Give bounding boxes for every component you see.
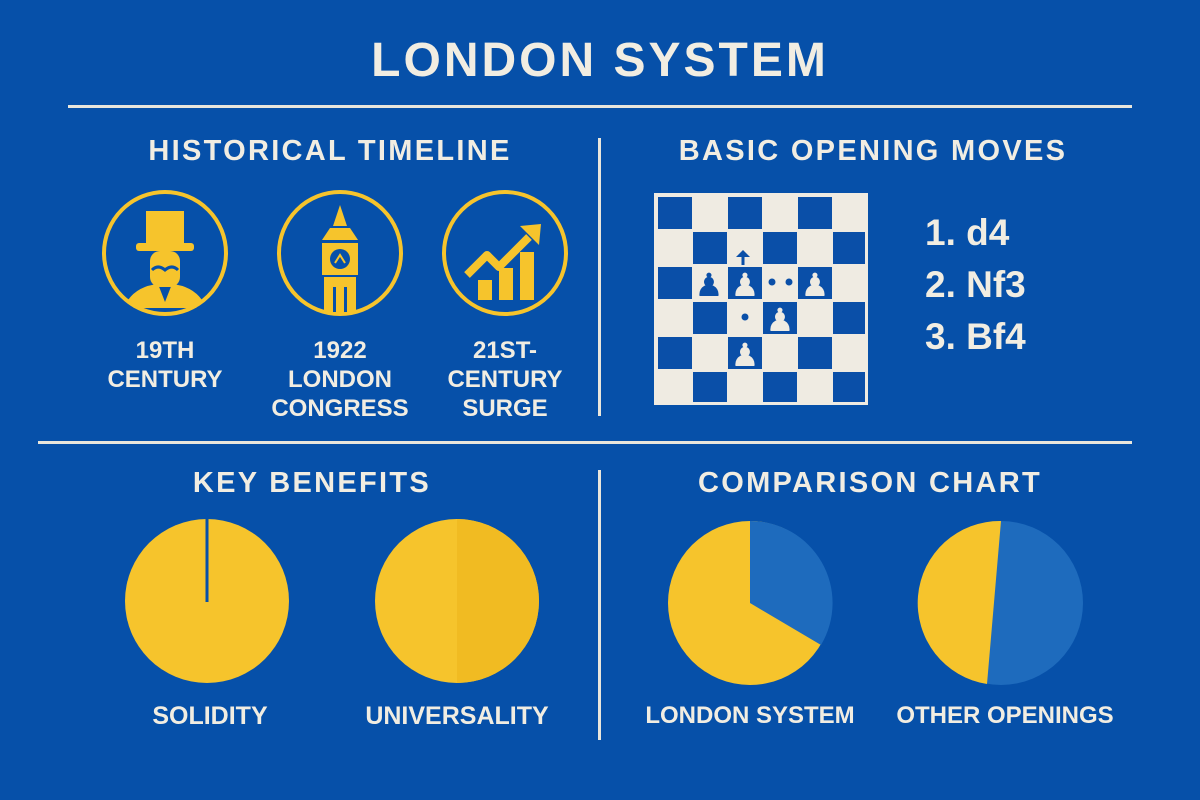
move list: 2. Nf3 [925, 264, 1026, 305]
text: CENTURY [447, 366, 563, 393]
pieces: ♟ [731, 337, 759, 373]
text: 1922 [313, 337, 367, 364]
move list [925, 212, 1026, 357]
pieces: ♟ [695, 267, 723, 303]
heading: key benefits: KEY BENEFITS [193, 467, 431, 499]
move list: 1. d4 [925, 212, 1009, 253]
text: CONGRESS [271, 395, 409, 422]
text: OTHER OPENINGS [896, 702, 1114, 729]
icon: growth chart [444, 192, 566, 314]
text: SURGE [462, 395, 548, 422]
text: 21ST- [473, 337, 537, 364]
pie labels: SOLIDITY [152, 702, 268, 730]
pieces: ♟ [766, 302, 794, 338]
pie: universality [375, 519, 539, 683]
pieces: ♟ [801, 267, 829, 303]
heading: historical timeline: HISTORICAL TIMELINE [148, 135, 512, 167]
text: LONDON SYSTEM [645, 702, 855, 729]
timeline labels: CENTURY [107, 366, 223, 393]
timeline labels [107, 337, 223, 393]
move list: 3. Bf4 [925, 316, 1026, 357]
pie: other openings [918, 521, 1083, 685]
heading: comparison chart: COMPARISON CHART [698, 467, 1042, 499]
text: UNIVERSALITY [365, 702, 549, 730]
pie: london system [668, 521, 833, 685]
text: LONDON [288, 366, 392, 393]
title: LONDON SYSTEM [371, 34, 829, 87]
icon: big ben [279, 192, 401, 314]
pie: solidity [125, 519, 289, 683]
heading: basic opening moves: BASIC OPENING MOVES [679, 135, 1067, 167]
chess board [654, 193, 868, 405]
icon: victorian gentleman [104, 192, 226, 314]
pieces: ♟ [731, 267, 759, 303]
pieces [695, 267, 829, 373]
timeline labels: 19TH [136, 337, 194, 364]
